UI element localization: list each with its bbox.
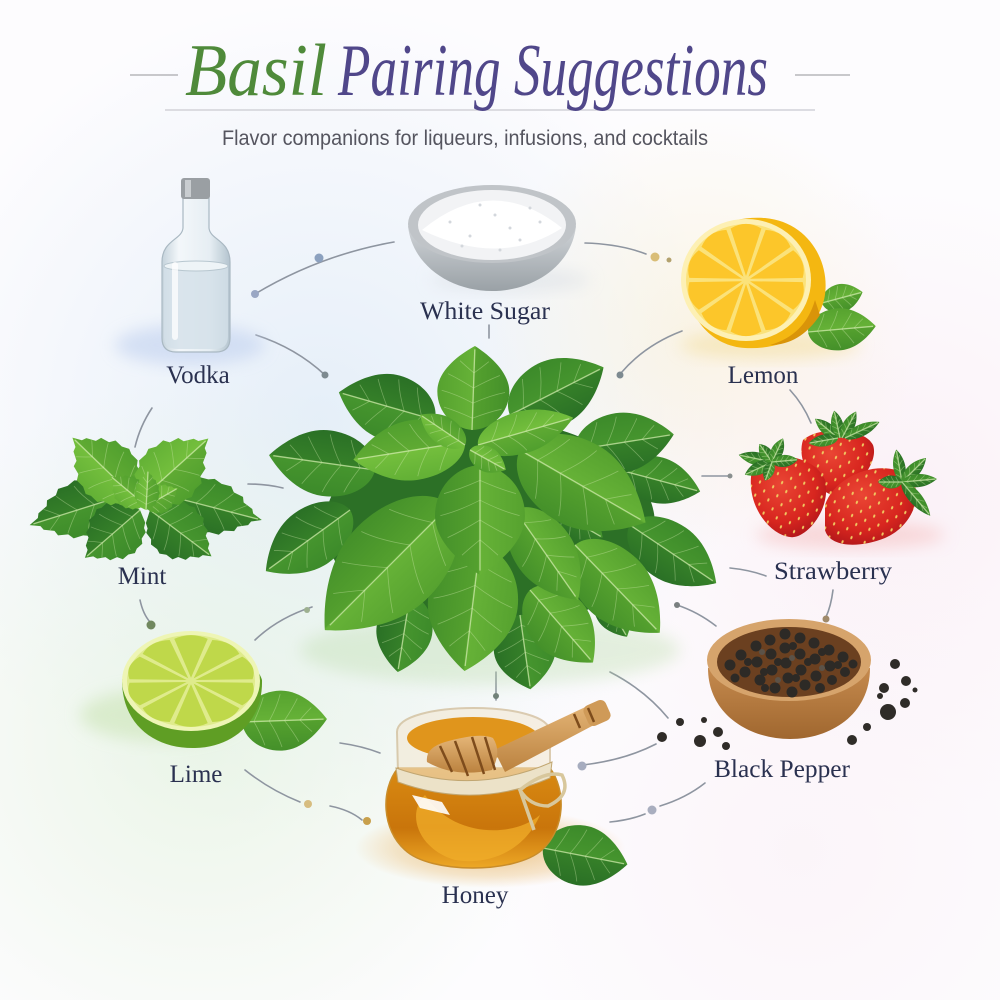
lemon [680, 218, 878, 359]
label: White Sugar: White Sugar [420, 298, 551, 325]
connectors [135, 242, 833, 825]
subtitle: Flavor companions for liqueurs, infusions, and cocktails [222, 127, 708, 150]
title [130, 30, 850, 112]
honey dipper [427, 698, 612, 776]
black pepper bowl [657, 619, 918, 750]
strawberry: right [825, 448, 937, 545]
label: Lemon: Lemon [728, 362, 799, 389]
mint [21, 414, 269, 580]
label: Lime: Lime [170, 761, 222, 788]
title: Pairing Suggestions [337, 30, 768, 112]
label: Honey: Honey [442, 882, 509, 909]
label: Strawberry: Strawberry [774, 558, 893, 585]
label: Black Pepper: Black Pepper [714, 756, 851, 783]
title: Basil [185, 30, 327, 112]
lime [80, 631, 328, 752]
vodka bottle [115, 178, 265, 365]
label: Vodka: Vodka [166, 362, 230, 389]
strawberry: top [801, 409, 882, 497]
twine bow [520, 774, 565, 830]
scattered peppercorns [657, 659, 918, 750]
central basil bunch [248, 338, 732, 694]
strawberry: left [737, 436, 826, 537]
white sugar bowl [408, 185, 590, 292]
label: Mint: Mint [118, 563, 166, 590]
strawberries [737, 409, 945, 549]
basil back leaves [248, 338, 732, 694]
peppercorns [724, 628, 858, 698]
honey jar [355, 698, 633, 894]
